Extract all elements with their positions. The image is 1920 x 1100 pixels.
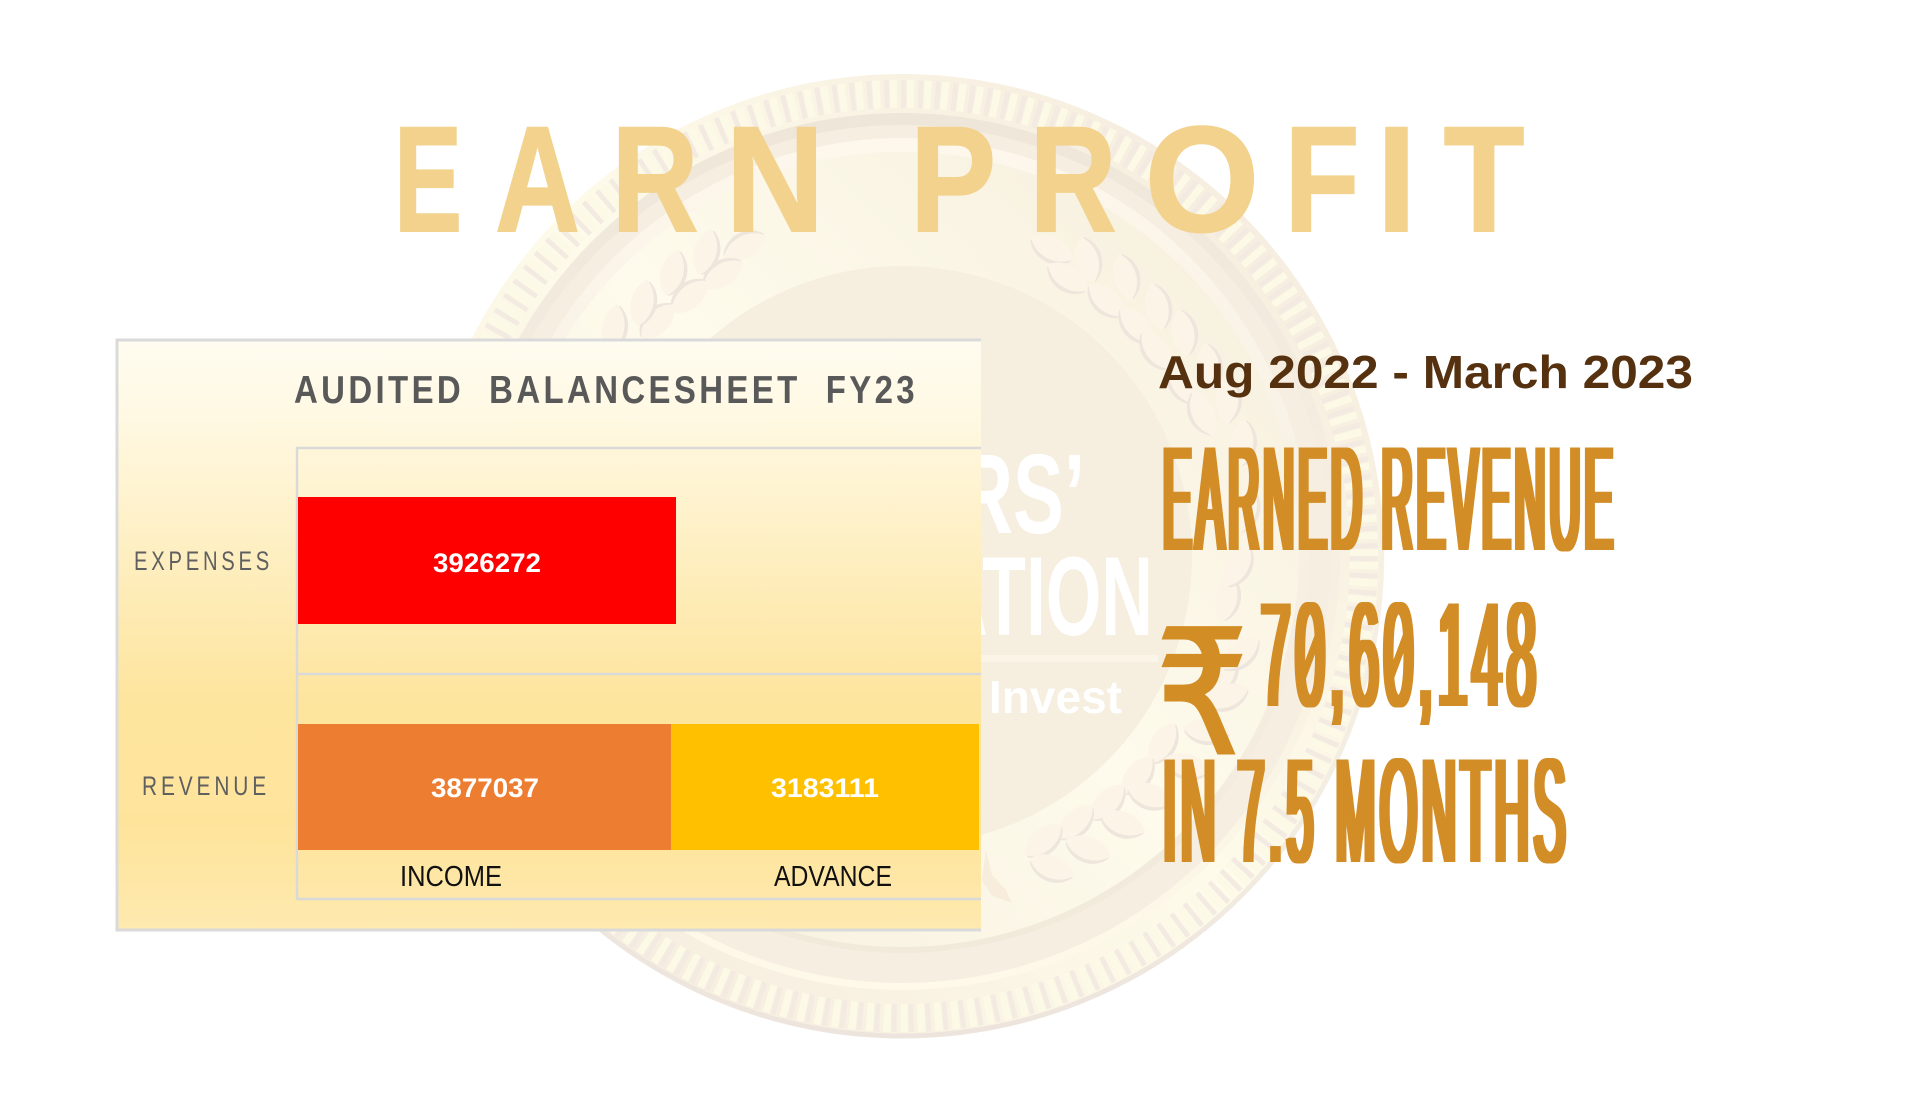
panel background	[117, 340, 981, 930]
reeded edge	[440, 94, 1364, 1018]
segment label: advance: ADVANCE	[774, 861, 892, 893]
bar: expenses: 3926272	[433, 548, 541, 578]
text block: earned revenue	[1156, 346, 1693, 894]
bar: revenue income: 3877037	[431, 773, 539, 803]
logo text line 2: ATION	[936, 534, 1153, 659]
inner bevel ring	[494, 138, 1310, 953]
logo tagline: Invest	[989, 671, 1122, 723]
title: EARN PROFIT: A	[495, 95, 580, 263]
coin rim	[420, 74, 1384, 1038]
segment label: income: INCOME	[400, 861, 502, 893]
bar: revenue advance: 3183111	[771, 773, 879, 803]
wreath field	[504, 152, 1300, 947]
title: EARN PROFIT: N	[726, 96, 824, 263]
title: EARN PROFIT: O	[1145, 97, 1259, 263]
axis label: expenses: EXPENSES	[134, 546, 273, 576]
outer bevel ring	[464, 113, 1340, 990]
bar: expenses	[298, 497, 676, 624]
panel: audited balance sheet chart	[117, 340, 981, 930]
coin watermark	[420, 74, 1384, 1038]
date range: Aug 2022 - March 2023	[1158, 346, 1693, 398]
bar: revenue advance	[671, 724, 979, 850]
axis label: revenue: REVENUE	[142, 771, 270, 801]
title: EARN PROFIT: T	[1444, 95, 1524, 263]
plot frame	[297, 448, 981, 899]
title: EARN PROFIT: R	[612, 95, 698, 263]
wreath leaves	[598, 222, 1268, 903]
ring band	[473, 125, 1331, 983]
bar: revenue income	[298, 724, 671, 850]
rim edge	[422, 76, 1382, 1036]
title: EARN PROFIT	[394, 95, 1524, 264]
revenue amount	[1261, 571, 1541, 738]
logo text line 1: RS’	[958, 431, 1085, 557]
logo rule	[700, 655, 1158, 662]
title: EARN PROFIT: P	[910, 95, 996, 263]
title: EARN PROFIT: E	[394, 97, 462, 264]
center disc	[612, 266, 1192, 846]
title: EARN PROFIT: R	[1030, 95, 1116, 263]
title: EARN PROFIT: I	[1377, 97, 1416, 264]
rupee sign: ₹	[1156, 598, 1248, 790]
chart heading: AUDITED BALANCESHEET FY23	[294, 369, 918, 412]
title: EARN PROFIT: F	[1284, 96, 1360, 264]
